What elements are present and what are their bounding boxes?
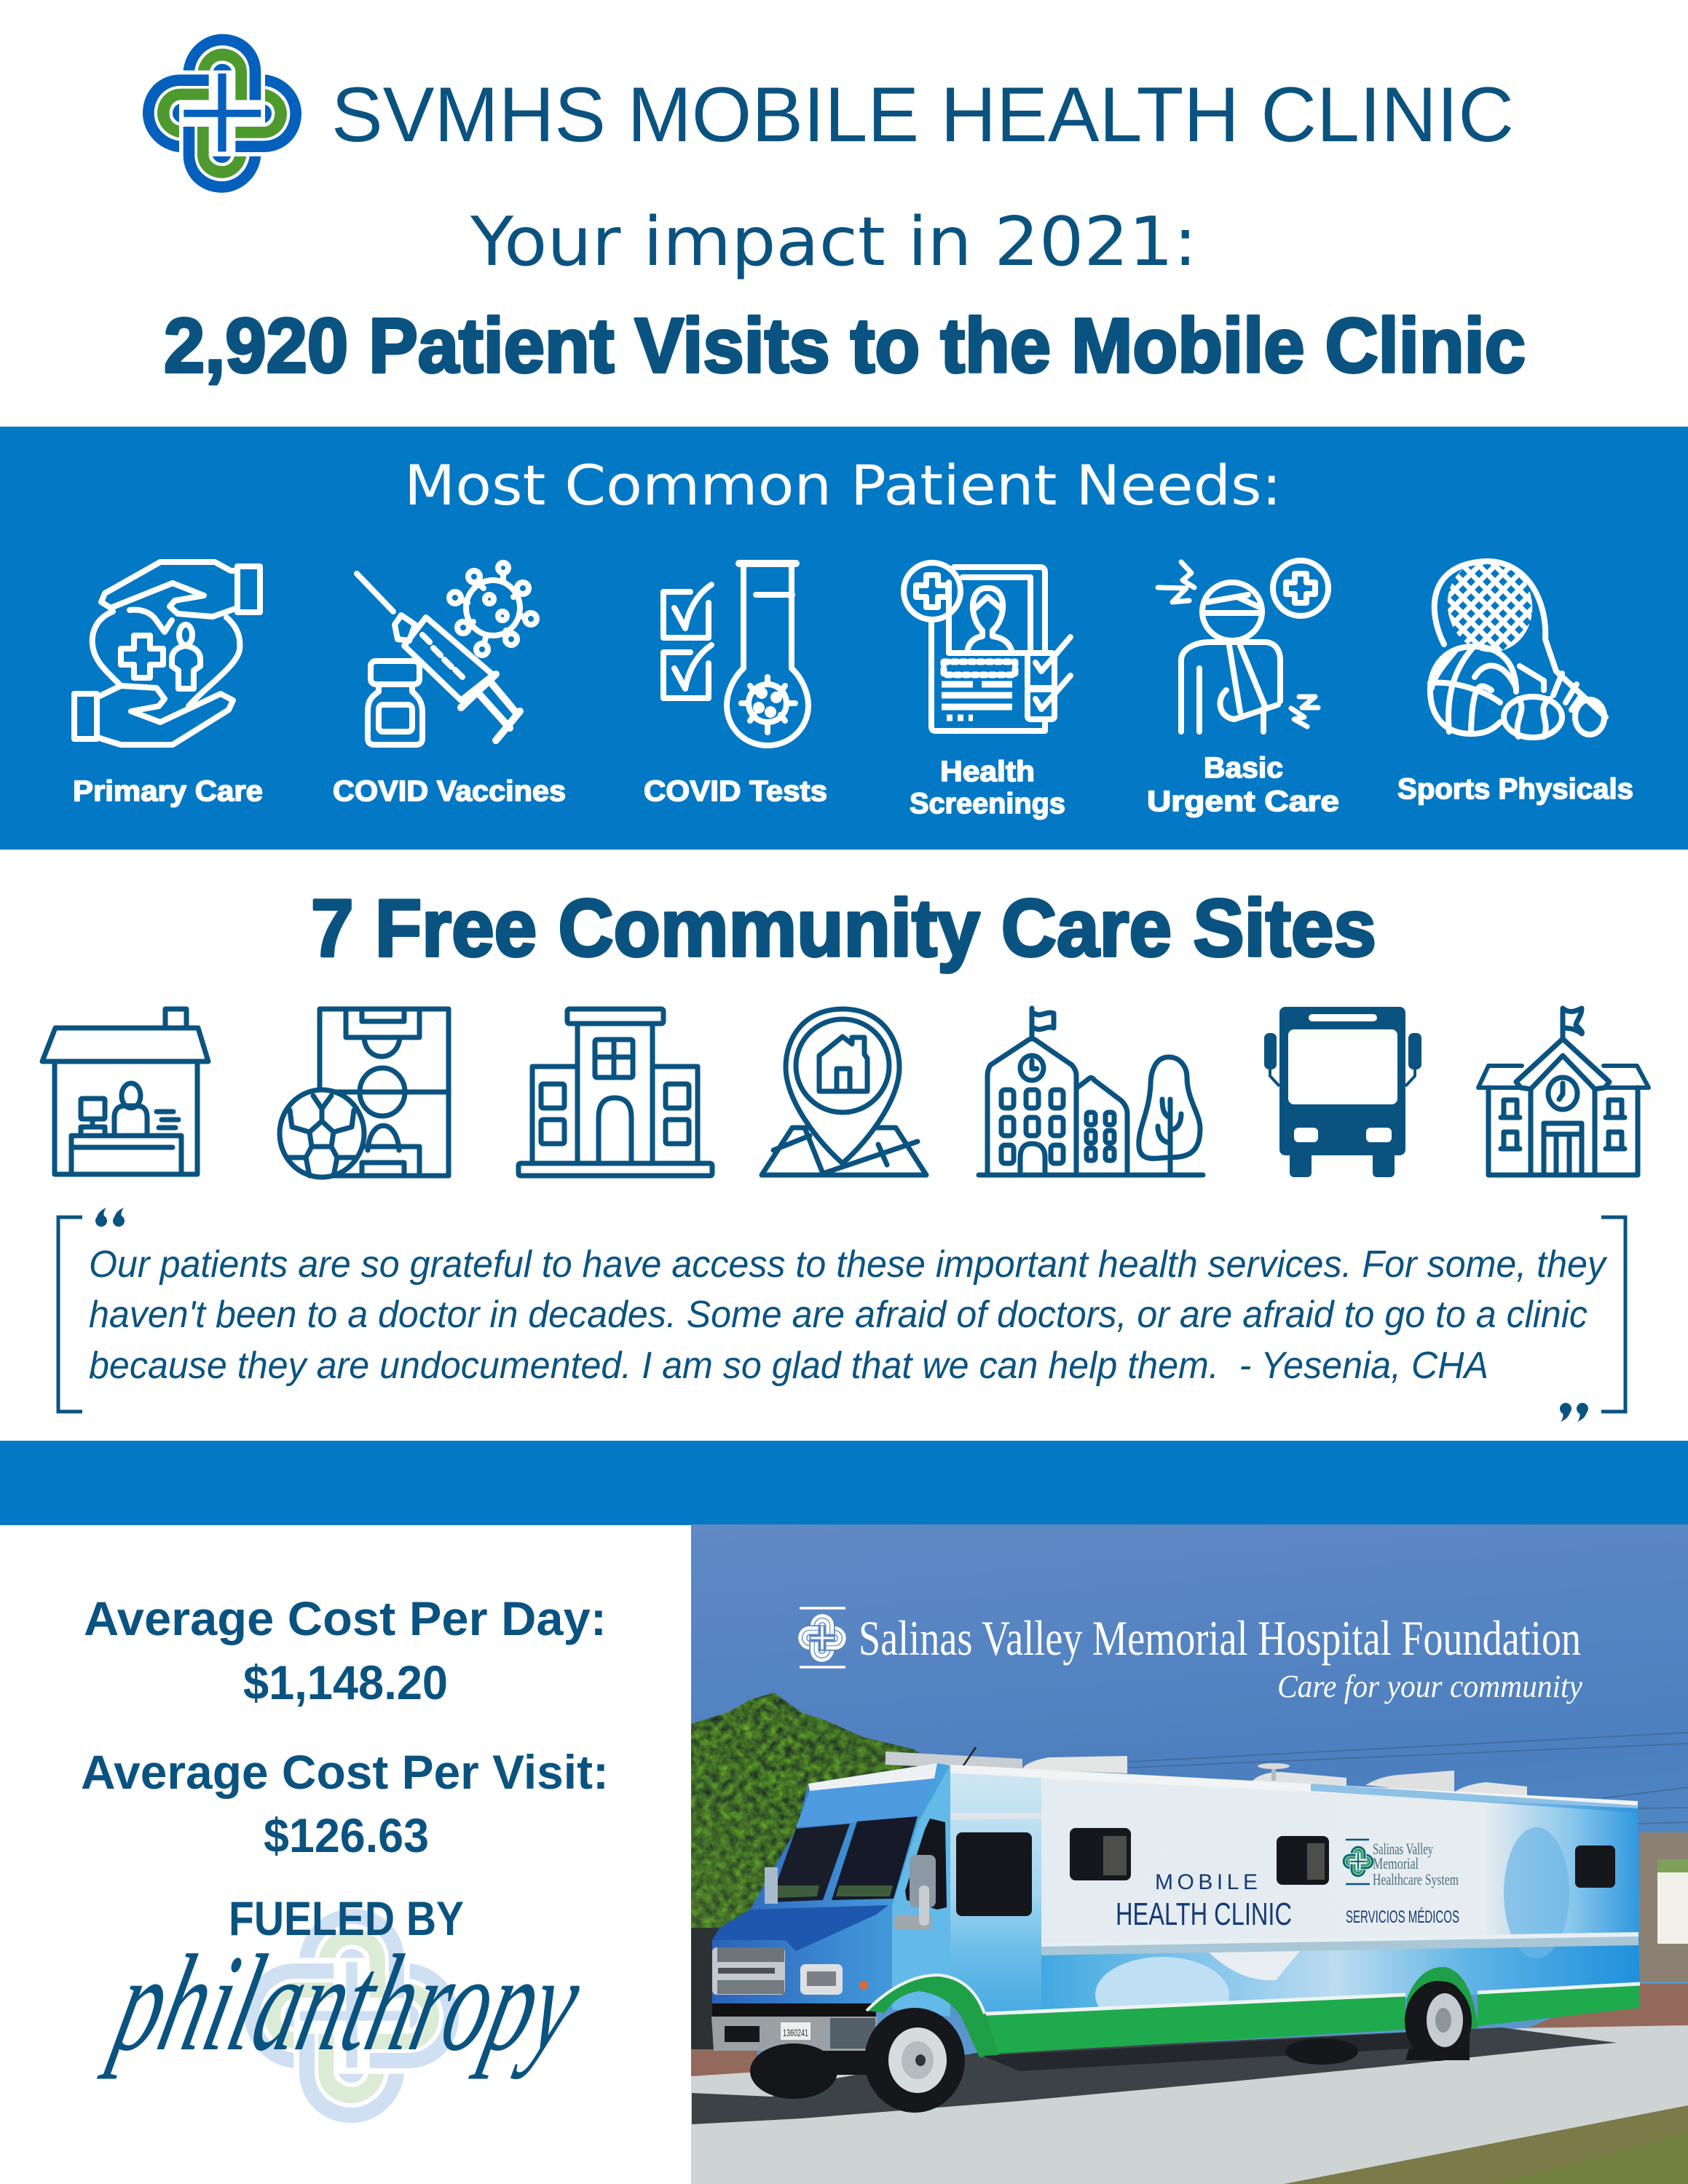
quote text	[89, 1243, 1608, 1387]
heading: community care sites: 7 Free Community Care Sites	[311, 883, 1376, 973]
icon: bus	[1264, 1007, 1421, 1177]
icon: foundation mark	[798, 1614, 846, 1662]
icon: school with tree	[979, 1008, 1203, 1175]
body stripe	[1041, 1936, 1638, 1955]
labels: patient needs: Sports Physicals	[1397, 773, 1633, 805]
stat: cost per day: $1,148.20	[243, 1655, 448, 1709]
fence and sign	[691, 1832, 1688, 2052]
closing quote mark	[1560, 1403, 1588, 1422]
truck lettering: HEALTH CLINIC	[1116, 1896, 1292, 1932]
stat: cost per visit	[81, 1745, 609, 1862]
labels: patient needs: Urgent Care	[1147, 786, 1339, 818]
labels: patient needs: COVID Vaccines	[333, 775, 566, 807]
truck shadow	[692, 2027, 1617, 2124]
roof equipment	[886, 1747, 1527, 1798]
rear wheel well	[1405, 1982, 1470, 2060]
quote text: because they are undocumented. I am so glad that we can help them. - Yesenia, CHA	[89, 1345, 1488, 1387]
panel: cost statistics	[81, 1591, 609, 2123]
labels: patient needs: COVID Tests	[644, 775, 827, 807]
front left wheel	[750, 2043, 837, 2099]
icon: map pin with house	[762, 1009, 926, 1175]
stat: cost per visit: Average Cost Per Visit:	[81, 1745, 609, 1799]
stat: cost per visit: $126.63	[264, 1808, 429, 1862]
quote text: haven't been to a doctor in decades. Some are afraid of doctors, or are afraid to go to a clinic	[89, 1294, 1588, 1336]
labels: patient needs	[73, 752, 1633, 820]
box body	[936, 1773, 1640, 1982]
stat: cost per day: Average Cost Per Day:	[84, 1591, 607, 1645]
quote bracket left	[58, 1217, 82, 1412]
fueled by: FUELED BY	[229, 1891, 464, 1945]
photo: mobile clinic truck	[691, 1524, 1688, 2184]
icon: town hall with clock	[1478, 1008, 1649, 1175]
bumper and plate: 1360241	[783, 2027, 808, 2038]
front wheel	[864, 2008, 965, 2113]
philanthropy script: philanthropy	[96, 1926, 595, 2079]
cab front	[712, 1763, 950, 2013]
icon: hospital building	[518, 1009, 712, 1176]
panel: most common patient needs	[0, 427, 1688, 850]
labels: patient needs: Screenings	[910, 788, 1065, 820]
icon: basic urgent care injured person	[1158, 561, 1328, 732]
truck lettering: Memorial	[1373, 1854, 1419, 1872]
foundation tagline: Care for your community	[1277, 1669, 1582, 1704]
labels: patient needs: Health	[940, 756, 1035, 788]
truck lettering: MOBILE	[1155, 1870, 1258, 1894]
bumper and plate	[711, 2003, 877, 2051]
mirror	[765, 1855, 936, 1929]
chassis	[823, 2051, 867, 2075]
icon: vaccine syringe, vial and virus	[357, 563, 537, 745]
door and body windows	[956, 1828, 1615, 1916]
icon: primary care hands and heart	[74, 562, 260, 745]
panel heading: Most Common Patient Needs:	[404, 453, 1282, 518]
headline: patient visits: 2,920 Patient Visits to the Mobile Clinic	[164, 303, 1526, 389]
lower body graphic	[1041, 1942, 1640, 2009]
title: SVMHS MOBILE HEALTH CLINIC	[331, 71, 1514, 158]
truck lettering: Healthcare System	[1373, 1870, 1459, 1888]
trees	[691, 1689, 946, 1940]
power lines	[1129, 1733, 1688, 1824]
icon row: care sites	[42, 1007, 1649, 1177]
cab side window	[905, 1819, 947, 1910]
truck lettering: SERVICIOS MÉDICOS	[1346, 1907, 1459, 1927]
icon: SVMHS logo	[143, 34, 301, 193]
rear wheel	[1405, 1981, 1472, 2061]
grass	[1284, 2105, 1688, 2184]
icon: sports physicals racket and balls	[1427, 558, 1609, 740]
blue divider band	[0, 1441, 1688, 1525]
sky	[691, 1524, 1688, 2063]
watermark logo	[245, 1909, 459, 2123]
icon: clinic storefront	[42, 1009, 208, 1174]
quote bracket right	[1601, 1217, 1625, 1412]
truck lettering: Salinas Valley	[1373, 1840, 1433, 1858]
header: logo and title	[143, 34, 1514, 193]
icon: soccer field and ball	[280, 1009, 449, 1177]
icon: health screening document	[904, 563, 1070, 731]
windshield	[770, 1824, 850, 1902]
foundation logo on photo	[798, 1608, 1582, 1704]
quote text: Our patients are so grateful to have access to these important health services. For some, they	[89, 1243, 1608, 1286]
stat: cost per day	[84, 1591, 607, 1709]
truck lettering	[1116, 1840, 1459, 1932]
labels: patient needs: Basic	[1204, 752, 1283, 784]
concrete ground	[691, 2025, 1688, 2184]
gravel	[691, 1984, 1688, 2076]
wheel arches	[867, 1977, 999, 2057]
cab door	[950, 1773, 1041, 2012]
subheading: your impact: Your impact in 2021:	[470, 202, 1197, 281]
green skirt	[972, 1996, 1405, 2054]
grille and headlight	[712, 1947, 868, 1995]
callout: patient quote	[58, 1208, 1625, 1422]
opening quote mark	[95, 1208, 125, 1227]
icon: covid test tube and checklist	[663, 563, 808, 745]
labels: patient needs: Primary Care	[73, 775, 263, 807]
